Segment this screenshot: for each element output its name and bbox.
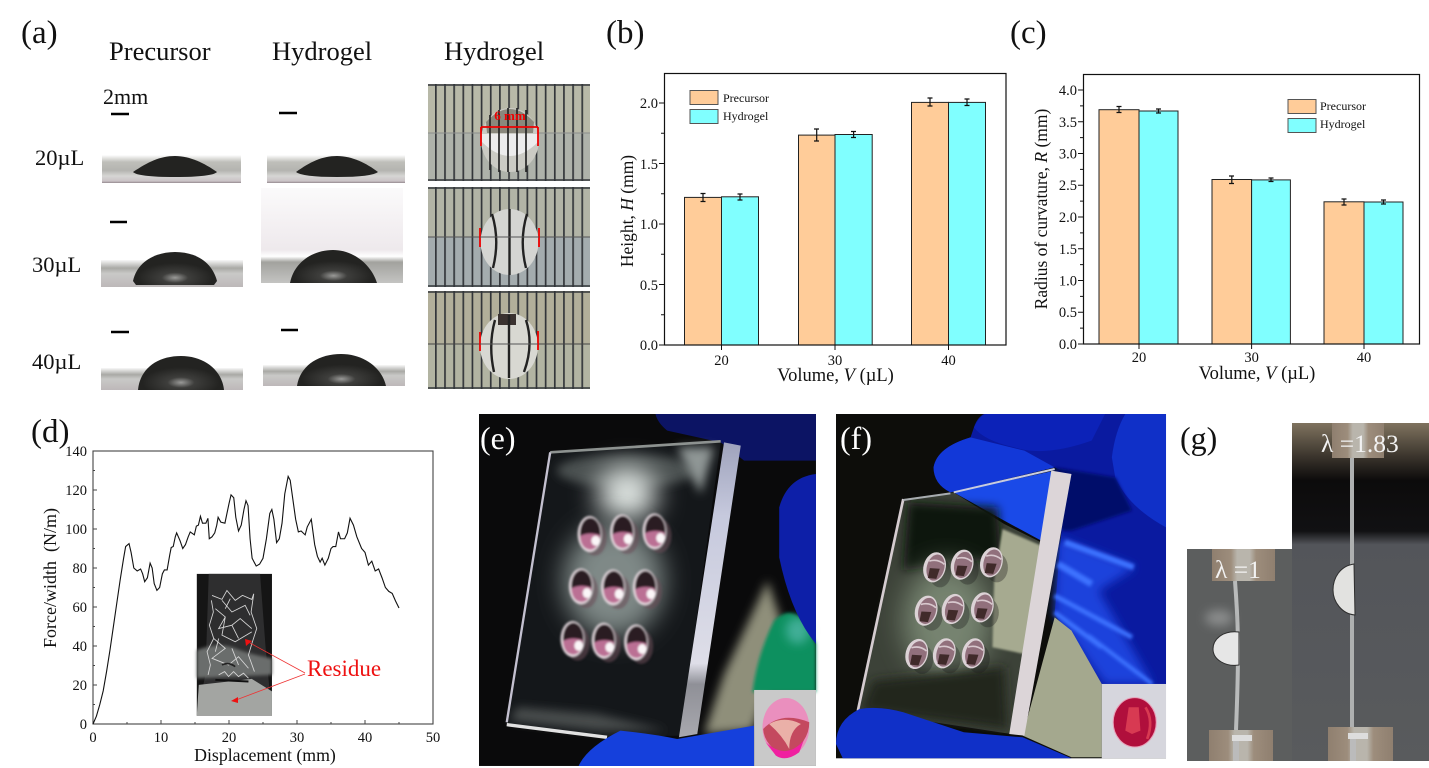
legend: Precursor [1320,99,1366,113]
top clamp [1332,423,1384,458]
y tick labels: 0.0 [1059,337,1077,353]
y tick labels: 20 [72,678,87,694]
y tick labels: 0.0 [640,338,658,354]
y tick labels: 2.5 [1059,178,1077,194]
fibre [1235,581,1238,730]
x tick labels [89,730,440,746]
y tick labels: 60 [72,600,87,616]
photo scene f [836,414,1166,758]
glass plate [858,469,1102,757]
y tick labels: 1.0 [640,217,658,233]
glove highlights [1055,537,1152,684]
x axis title: Volume, V (µL) [1199,364,1315,384]
panel label g: (g) [1180,420,1217,456]
y tick labels: 0 [80,717,87,733]
panel a: droplet profiles and top views [21,15,590,390]
panel label e: (e) [480,420,516,456]
x tick labels: 30 [290,730,304,746]
y tick labels: 2.0 [1059,210,1077,226]
glove knuckle [1112,414,1166,527]
x tick labels [714,353,956,369]
x tick labels: 40 [941,353,956,369]
panel c: radius of curvature bar chart [1010,15,1420,384]
y tick labels: 1.0 [1059,274,1077,290]
axis ticks [93,470,433,724]
y tick labels: 140 [65,444,87,460]
photo scene e [479,414,816,766]
y tick labels: 120 [65,483,87,499]
x tick labels: 20 [222,730,236,746]
legend: Hydrogel [723,109,769,123]
x tick labels: 30 [1244,350,1259,366]
y tick labels: 0.5 [640,278,658,294]
panel g: stretched lens on fibre [1180,420,1429,761]
force curve [93,476,399,724]
legend: Precursor [723,91,769,105]
error bars [700,98,970,202]
x tick labels: 20 [714,353,729,369]
y axis title: Force/width (N/m) [40,508,61,648]
hydrogel bars [722,102,986,345]
inset: ruby droplet [1102,684,1166,758]
precursor bars [684,102,948,345]
glove bottom [836,708,1071,758]
inset: pink droplet [754,690,816,766]
x tick labels: 40 [1357,350,1371,366]
droplet: hydrogel 40 µL [263,354,405,386]
y tick labels: 0.5 [1059,305,1077,321]
glove top finger [974,414,1105,451]
legend [690,90,769,124]
droplet [1213,632,1239,665]
glove bottom [579,726,754,766]
row label 30 µL: 30µL [32,252,81,277]
x tick labels [1132,350,1371,366]
legend: Hydrogel [1320,117,1366,131]
axis ticks [659,103,948,350]
panel e: lens array photo [479,414,816,766]
y tick labels: 40 [72,639,87,655]
lens droplets e [561,513,672,664]
y tick labels [1059,83,1077,353]
background objects [704,474,816,734]
y tick labels [65,444,87,733]
droplet: precursor 30 µL [101,252,243,287]
panel label b: (b) [606,15,644,51]
y tick labels: 4.0 [1059,83,1077,99]
x tick labels: 10 [154,730,168,746]
droplet [1333,564,1355,615]
stretch ratio 1: λ =1 [1215,555,1261,584]
error bars [1116,106,1386,205]
axis ticks [1078,90,1364,349]
column heading hydrogel side view: Hydrogel [272,36,372,66]
residue arrows [231,639,305,703]
y tick labels [640,96,658,354]
stretch ratio 1.83: λ =1.83 [1321,429,1399,458]
scale label: 2mm [103,84,148,109]
glass plate [507,441,741,737]
hydrogel bars [1139,111,1403,344]
x tick labels: 30 [828,353,842,369]
x axis title: Volume, V (µL) [777,366,894,386]
y tick labels: 100 [65,522,87,538]
column heading precursor: Precursor [109,36,211,66]
top view 30 µL [428,187,590,287]
blurred ghost [1205,610,1233,626]
axes frame [1084,74,1420,344]
panel label c: (c) [1010,15,1047,51]
column heading hydrogel top view: Hydrogel [444,36,544,66]
glove thumb [934,437,1055,492]
inset photo: peeled surface [197,574,272,716]
y tick labels: 1.5 [640,157,658,173]
top view 20 µL with 6 mm dimension [428,84,590,181]
droplet: hydrogel 30 µL [261,188,403,283]
y tick labels: 1.5 [1059,242,1077,258]
top view 20 µL with 6 mm dimension: 6 mm [494,108,526,123]
panel label f: (f) [840,420,872,456]
bottom clamp [1328,727,1393,761]
panel label a: (a) [21,15,58,51]
scale bars [110,113,298,332]
y tick labels: 80 [72,561,87,577]
x tick labels: 20 [1132,350,1146,366]
droplet: precursor 40 µL [101,356,243,390]
panel f: lens array photo [836,414,1166,758]
panel d: force displacement curve [31,414,440,766]
droplet: precursor 20 µL [102,155,241,183]
y axis title: Height, H (mm) [617,155,637,267]
image: unstretched [1187,549,1292,761]
x tick labels: 40 [358,730,372,746]
glove shadow [1055,467,1132,531]
precursor bars [1099,110,1364,344]
y tick labels: 3.0 [1059,146,1077,162]
lens droplets f [902,545,1008,674]
glove hand base [934,414,1166,684]
row label 20 µL: 20µL [35,145,84,170]
panel b: height bar chart [606,15,1006,386]
residue label: Residue [307,656,381,681]
x axis title: Displacement (mm) [194,745,336,766]
panel label d: (d) [31,414,69,450]
top clamp [1212,549,1275,581]
y tick labels: 2.0 [640,96,658,112]
image: stretched [1292,423,1429,761]
row label 40 µL: 40µL [32,349,81,374]
glove top [656,414,816,461]
legend [1288,99,1366,132]
y axis title: Radius of curvature, R (mm) [1031,108,1051,309]
x tick labels: 0 [89,730,97,746]
x tick labels: 50 [426,730,440,746]
fibre [1350,458,1354,727]
top view 40 µL [428,291,590,389]
droplet: hydrogel 20 µL [267,155,405,183]
axes frame [93,451,433,724]
bottom clamp [1209,730,1273,761]
y tick labels: 3.5 [1059,115,1077,131]
axes frame [664,74,1006,345]
